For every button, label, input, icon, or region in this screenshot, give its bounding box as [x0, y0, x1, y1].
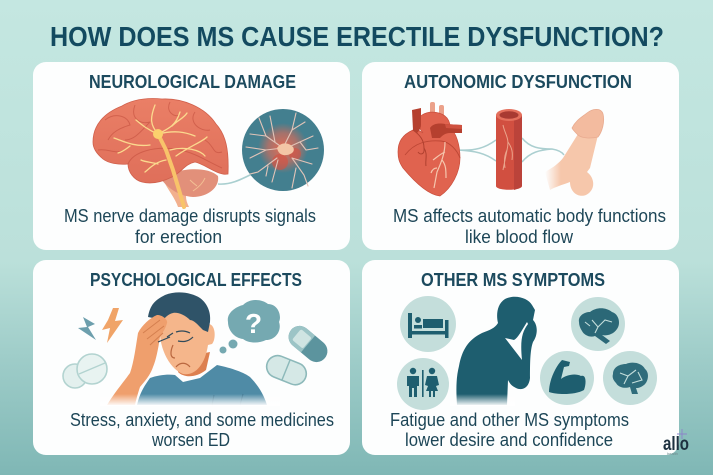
- icon: man and woman: [397, 358, 449, 410]
- body text: psychological effects: worsen ED: [151, 430, 230, 450]
- icon: blue lightning: [78, 317, 96, 340]
- heading: psychological effects: PSYCHOLOGICAL EFFECTS: [90, 270, 302, 290]
- body text: other MS symptoms: lower desire and confidence: [405, 430, 613, 450]
- icon: damaged nerve close-up: [242, 109, 324, 191]
- icon: flexed arm: [540, 351, 594, 405]
- connector lines: [458, 138, 564, 162]
- icon: oval tablet: [263, 352, 310, 388]
- icon: thought bubble with question mark: ?: [245, 308, 262, 339]
- panel: other MS symptoms: [362, 260, 679, 455]
- body text: psychological effects: [70, 410, 334, 450]
- heading: neurological damage: NEUROLOGICAL DAMAGE: [89, 72, 296, 92]
- body text: neurological damage: [64, 206, 316, 247]
- icon: brain with stem: [603, 351, 657, 405]
- panel: psychological effects: [33, 260, 350, 455]
- body text: neurological damage: MS nerve damage disrupts signals: [64, 206, 316, 226]
- panel: neurological damage: [33, 62, 350, 250]
- heading: other MS symptoms: OTHER MS SYMPTOMS: [421, 270, 605, 290]
- icon: capsule: [284, 321, 332, 367]
- figure: man silhouette: [450, 297, 537, 406]
- logo: allo health: health: [667, 451, 678, 456]
- icon: brain with damaged nerve pathways: [93, 99, 228, 207]
- icon: thought bubble with question mark: [220, 300, 280, 354]
- body text: other MS symptoms: Fatigue and other MS symptoms: [390, 410, 629, 430]
- heading: autonomic dysfunction: AUTONOMIC DYSFUNCTION: [404, 72, 632, 92]
- icon: blood vessel: [496, 109, 522, 190]
- connector line: [218, 174, 252, 184]
- icon: male anatomy: [545, 109, 604, 196]
- body text: autonomic dysfunction: [393, 206, 666, 247]
- body text: other MS symptoms: [390, 410, 629, 450]
- body text: psychological effects: Stress, anxiety, and some medicines: [70, 410, 334, 430]
- body text: autonomic dysfunction: like blood flow: [465, 227, 574, 247]
- icon: bed: [400, 296, 456, 352]
- panel: autonomic dysfunction: [362, 62, 679, 250]
- icon: orange lightning: [102, 308, 123, 343]
- icon: brain: [571, 297, 625, 351]
- logo: allo health: allo: [663, 434, 689, 455]
- logo: allo health: [663, 429, 689, 456]
- icon: round tablets: [63, 354, 107, 388]
- body text: autonomic dysfunction: MS affects automatic body functions: [393, 206, 666, 226]
- icon: heart: [398, 102, 462, 196]
- figure: stressed man: [100, 292, 280, 406]
- body text: neurological damage: for erection: [135, 227, 222, 247]
